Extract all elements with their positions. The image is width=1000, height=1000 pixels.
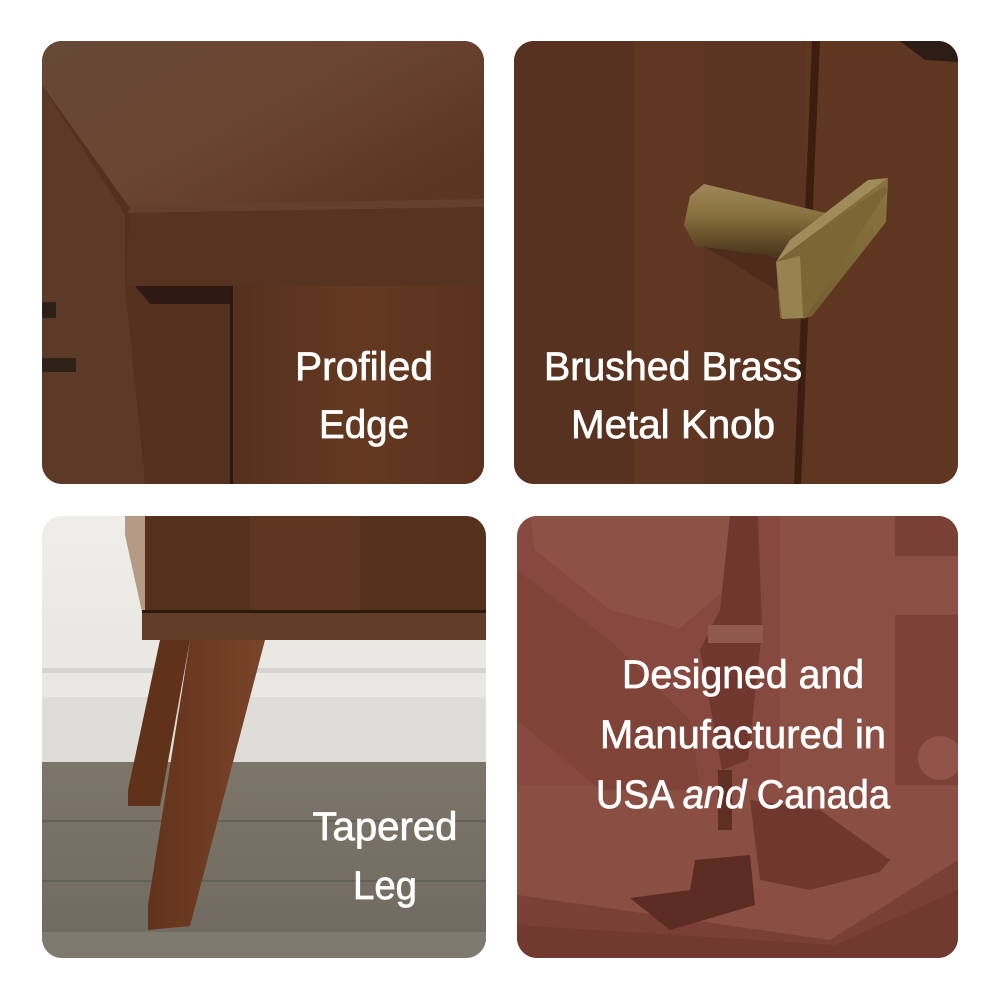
- hinge: [630, 855, 755, 930]
- door gap: [794, 41, 820, 484]
- icon: brass knob: [684, 178, 888, 319]
- cabinet top surface: [42, 41, 484, 208]
- knob shadow: [690, 240, 780, 290]
- door frame: [145, 304, 230, 484]
- front leg: [148, 640, 265, 930]
- panel: brushed brass metal knob: [514, 41, 958, 484]
- label: designed and manufactured: Manufactured in: [600, 713, 886, 757]
- floor: [42, 762, 486, 958]
- door panel: [296, 286, 484, 484]
- drill: [700, 516, 762, 770]
- baseboard: [42, 640, 486, 700]
- side handles: [42, 302, 56, 318]
- cabinet body: [125, 516, 145, 612]
- panel: designed and manufactured: [517, 516, 962, 958]
- label: designed and manufactured: USA and Canada: [596, 773, 891, 817]
- panel: tapered leg: [42, 516, 486, 958]
- back leg: [128, 640, 190, 806]
- profiled edge front: [125, 201, 484, 286]
- label: designed and manufactured: [596, 653, 891, 817]
- label: tapered leg: Tapered: [312, 805, 458, 849]
- board: [517, 785, 958, 940]
- label: profiled edge: Edge: [319, 403, 409, 447]
- panel: profiled edge: [42, 41, 484, 484]
- label: designed and manufactured: Designed and: [622, 653, 864, 697]
- hand and arm: [530, 516, 536, 518]
- fingers: [750, 800, 890, 890]
- label: brushed brass metal knob: [544, 345, 802, 447]
- side of cabinet: [42, 85, 145, 484]
- label: brushed brass metal knob: Metal Knob: [571, 403, 775, 447]
- label: tapered leg: [312, 805, 458, 908]
- label: profiled edge: Profiled: [295, 345, 433, 389]
- label: profiled edge: [295, 345, 433, 447]
- label: brushed brass metal knob: Brushed Brass: [544, 345, 802, 389]
- label: tapered leg: Leg: [353, 864, 417, 908]
